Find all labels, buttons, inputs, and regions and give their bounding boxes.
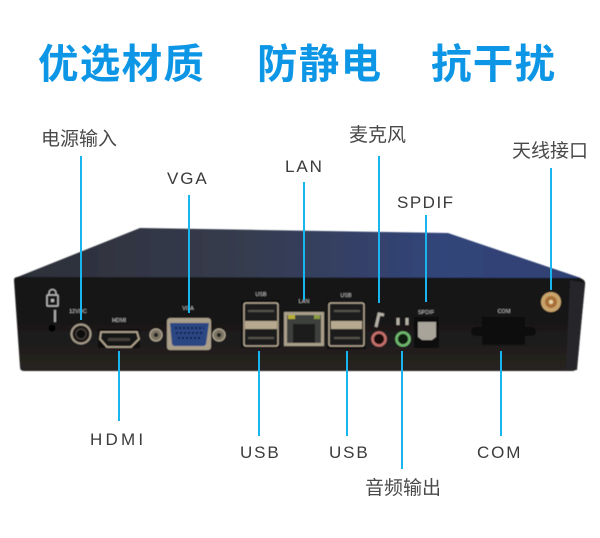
port: audio output jack	[396, 318, 410, 346]
port: 12VDC power jack	[69, 309, 90, 344]
port: antenna SMA connector	[541, 292, 561, 312]
port: HDMI: HDMI	[112, 318, 126, 324]
port: LAN RJ45: LAN	[299, 299, 309, 305]
port: HDMI	[98, 318, 140, 348]
port: USB pair right	[327, 293, 366, 349]
label: USB left: USB	[240, 443, 281, 462]
label: USB right: USB	[329, 443, 370, 462]
device top surface	[15, 228, 581, 278]
port: COM	[471, 309, 536, 345]
labels	[41, 124, 588, 499]
title: three feature headings: 优选材质	[38, 41, 205, 87]
device: mini PC rear panel	[14, 228, 585, 371]
label: antenna port: 天线接口	[512, 140, 588, 162]
port: SPDIF: SPDIF	[418, 310, 435, 316]
port: microphone jack	[372, 314, 386, 346]
callout lines	[81, 156, 551, 469]
label: SPDIF: SPDIF	[397, 193, 455, 212]
port: COM: COM	[498, 309, 511, 315]
label: microphone: 麦克风	[349, 124, 406, 146]
right side edge highlight	[566, 280, 585, 370]
title: three feature headings: 防静电	[257, 41, 382, 87]
label: HDMI: HDMI	[90, 430, 146, 449]
port: VGA: VGA	[182, 306, 194, 312]
title: three feature headings	[38, 41, 556, 87]
label: LAN: LAN	[285, 157, 324, 176]
port: VGA	[150, 306, 225, 350]
title: three feature headings: 抗干扰	[431, 41, 556, 87]
port: USB pair left: USB	[255, 292, 267, 298]
label: COM: COM	[477, 443, 522, 462]
device front panel	[14, 277, 585, 371]
port: USB pair left	[241, 292, 280, 348]
port: USB pair right: USB	[340, 293, 352, 299]
label: audio output: 音频输出	[365, 477, 441, 499]
label: VGA: VGA	[167, 169, 209, 188]
port: LAN RJ45	[284, 299, 324, 346]
port: 12VDC power jack: 12VDC	[69, 309, 87, 315]
port: SPDIF	[414, 310, 439, 348]
label: power input: 电源输入	[41, 128, 117, 150]
icon: lock switch	[47, 290, 58, 332]
